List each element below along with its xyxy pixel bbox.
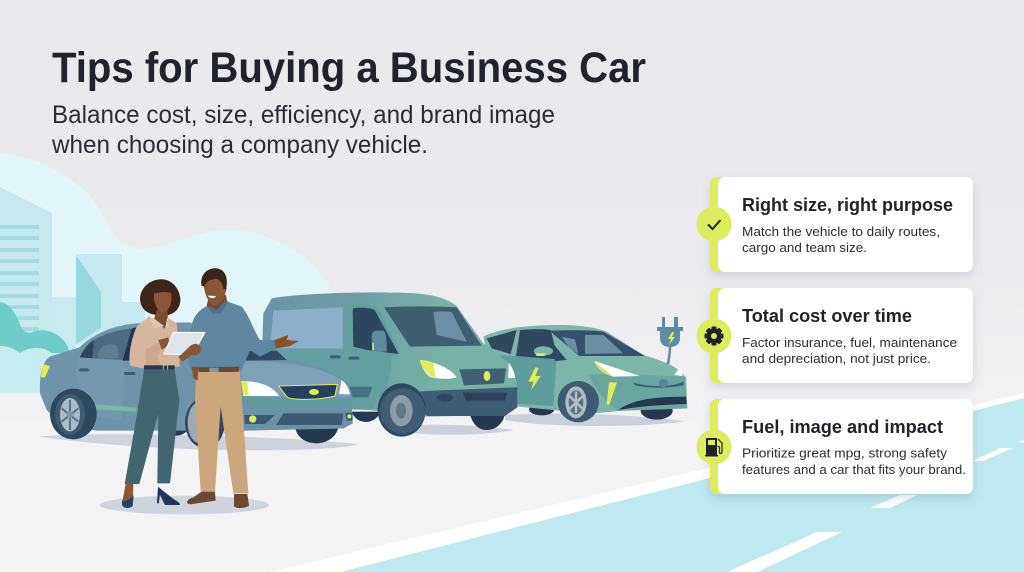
hand on tablet (178, 344, 201, 362)
headlight (241, 381, 279, 396)
electric car (483, 325, 687, 426)
sedan and people (38, 268, 358, 514)
headlight (594, 361, 640, 377)
heading: Total cost over time (742, 306, 912, 326)
woman (122, 279, 180, 508)
wing mirror (372, 331, 387, 352)
car body (483, 325, 687, 413)
wheel arch and wheel (378, 383, 426, 437)
bumper (413, 387, 517, 416)
heading: Right size, right purpose (742, 195, 953, 215)
road edge line (270, 393, 1024, 572)
blouse (129, 316, 180, 368)
van (260, 292, 518, 437)
tail light (41, 364, 50, 377)
door handle (79, 368, 89, 371)
shirt (188, 301, 278, 377)
body text: and depreciation, not just price. (742, 351, 931, 366)
panel: right size, right purpose (696, 177, 973, 272)
sedan shadow (38, 434, 358, 450)
car shadow (505, 414, 685, 426)
main wheel (558, 381, 599, 422)
far left wheel (163, 418, 188, 436)
windshield (240, 351, 287, 361)
front far wheel (470, 413, 505, 430)
sleeve and arm (145, 338, 169, 367)
road lane dashes (727, 440, 1024, 572)
windshield (549, 330, 645, 356)
panel: total cost over time (696, 288, 973, 383)
body text: features and a car that fits your brand. (742, 462, 966, 477)
fog lamp accent (607, 382, 617, 405)
rear side window (270, 307, 343, 348)
pocket hand (192, 367, 198, 381)
subtitle: when choosing a company vehicle. (51, 131, 428, 159)
front left wheel (185, 397, 225, 448)
van shadow (387, 425, 514, 435)
door handles (330, 355, 341, 358)
heading: Fuel, image and impact (742, 417, 943, 437)
shoes (187, 492, 216, 504)
side mirror (534, 346, 553, 356)
grille (459, 368, 506, 385)
body text: Match the vehicle to daily routes, (742, 224, 940, 239)
van sill panel (349, 387, 373, 397)
man (187, 268, 299, 508)
subtitle: Balance cost, size, efficiency, and brand image (52, 101, 555, 129)
background: city skyline hill (0, 153, 333, 393)
rear wheel (50, 389, 97, 439)
face (154, 292, 172, 312)
green side stripe (93, 404, 137, 412)
rear far wheel (352, 412, 380, 422)
sedan (40, 322, 353, 448)
grille (633, 382, 684, 388)
body text: Prioritize great mpg, strong safety (742, 446, 947, 460)
windshield (384, 306, 482, 347)
belt (144, 365, 175, 370)
plug icon (657, 317, 683, 364)
lightning bolt (528, 367, 541, 390)
rear far wheel (529, 403, 554, 415)
door window (353, 308, 399, 354)
neck (207, 295, 227, 314)
panel: fuel, image and impact (696, 399, 973, 494)
grille (279, 384, 337, 399)
icon: fuel pump (696, 430, 732, 464)
face (203, 278, 227, 305)
title: Tips for Buying a Business Car (52, 44, 646, 92)
sedan body (40, 322, 353, 431)
hand (274, 335, 299, 348)
tablet (164, 332, 205, 362)
shoes (122, 484, 133, 508)
side windows (487, 330, 517, 354)
belt (198, 367, 239, 373)
hair (201, 268, 227, 289)
body text: cargo and team size. (742, 240, 867, 255)
smile (208, 296, 216, 298)
lower bumper vents (276, 413, 343, 425)
body text: Factor insurance, fuel, maintenance (742, 335, 957, 350)
hair (140, 279, 180, 315)
front far wheel (641, 402, 673, 420)
van body (260, 292, 518, 417)
icon: check mark (696, 206, 732, 242)
trousers (195, 372, 248, 493)
people ground shadow (100, 496, 269, 514)
far wheel (295, 427, 338, 443)
icon: gear (696, 318, 732, 354)
trousers (125, 369, 179, 484)
headlight (420, 360, 457, 379)
windows (80, 340, 94, 358)
neck (154, 310, 168, 328)
road (340, 398, 1024, 572)
